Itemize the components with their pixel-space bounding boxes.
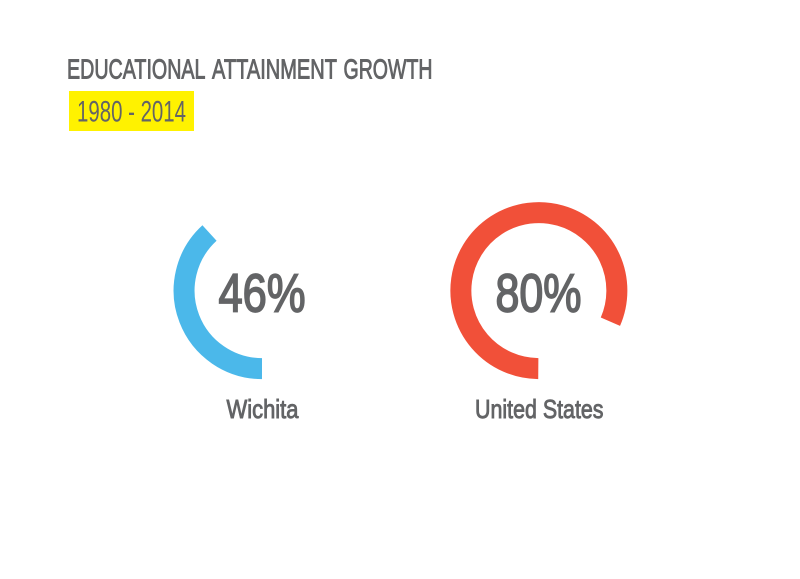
title: EDUCATIONAL	[67, 54, 206, 84]
title	[67, 54, 432, 84]
red arc	[461, 213, 617, 369]
United States label: United States	[475, 394, 604, 424]
title: GROWTH	[344, 54, 432, 84]
date range badge	[69, 91, 194, 131]
chart: Wichita ring	[184, 233, 306, 424]
title: ATTAINMENT	[212, 54, 337, 84]
Wichita percentage: 46%	[218, 264, 306, 324]
Wichita label: Wichita	[226, 394, 299, 424]
badge background	[69, 91, 194, 131]
United States percentage: 80%	[496, 264, 582, 324]
blue arc	[184, 233, 262, 369]
badge text: 1980 - 2014	[77, 96, 186, 128]
chart: United States ring	[461, 213, 617, 424]
